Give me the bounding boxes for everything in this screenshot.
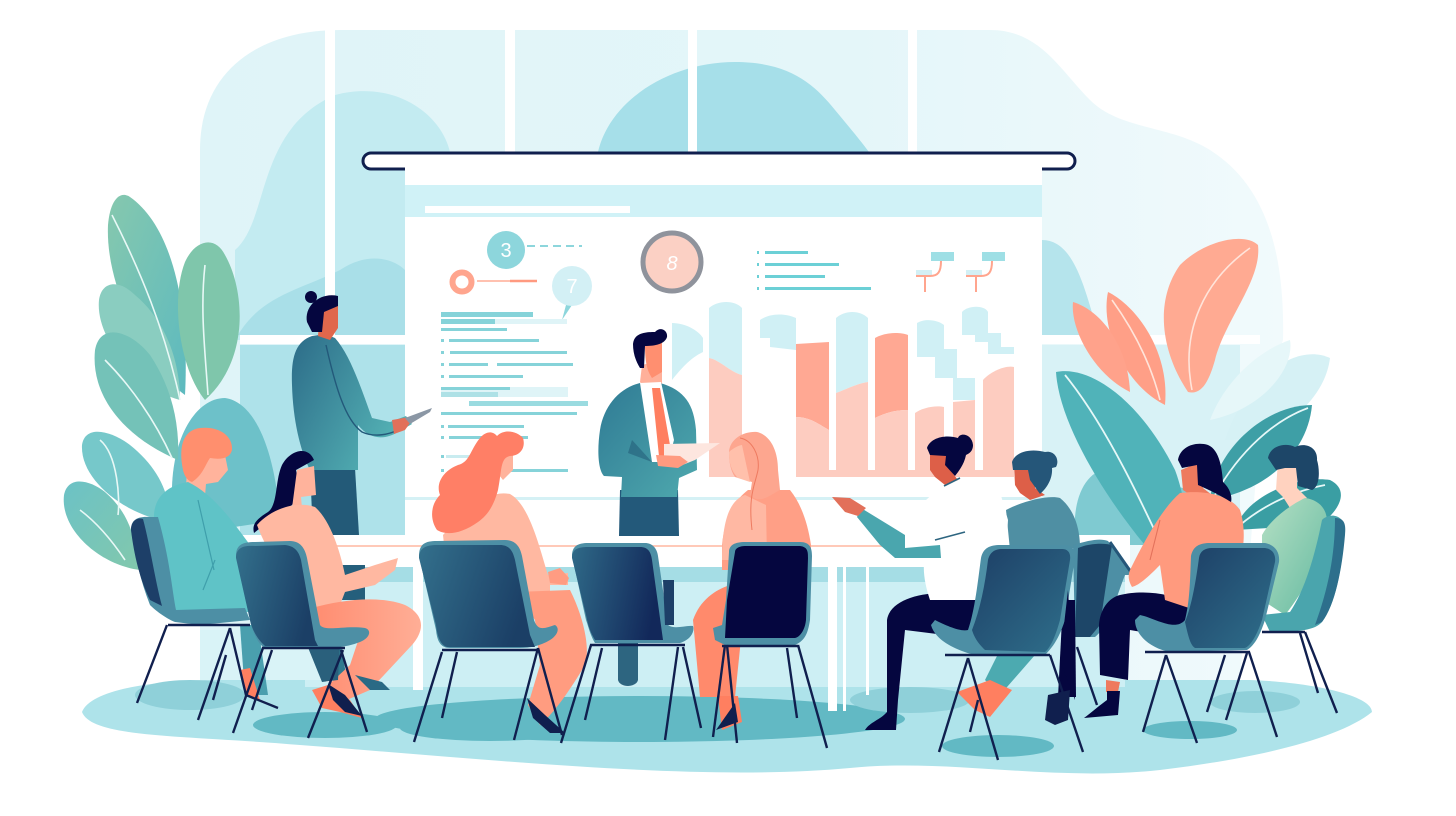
standing colleague [292,291,432,680]
background wall blob [200,30,1283,680]
text lines left [441,312,588,472]
floor shadows [135,680,1300,757]
presenter hair [633,329,667,368]
shoe [312,685,362,718]
leaf: salmon left [1073,302,1130,392]
head and hair [729,432,780,499]
hair [432,432,524,533]
laptop edge [338,565,365,600]
small connectors [916,252,1005,292]
torso and arm [1129,492,1244,610]
presenter neck [640,360,662,395]
leaf: teal right top [1210,405,1312,500]
presenter lower leg [618,640,638,686]
screen surface [405,155,1042,540]
face [495,445,513,480]
number badge 7 [552,266,592,320]
face [930,452,958,485]
attendee 1: teal shirt [154,428,268,700]
chair 8 [1135,543,1279,743]
lower body [693,585,745,697]
leaf: salmon big [1164,239,1258,393]
lower leg [240,625,268,695]
leaf: pale right [1225,354,1330,440]
attendee 2: dark hair [253,451,421,718]
chair 6 [931,545,1083,760]
torso [292,334,412,470]
shirt [1262,498,1327,615]
presenter jacket [598,383,697,497]
sleeve and hand [832,497,941,558]
shoe [718,696,742,730]
attendee 8: coral top [1084,444,1244,718]
chair 2 [233,541,369,738]
hand and tablet [392,408,432,434]
window hill left [235,91,450,340]
window lower left pane [240,345,405,535]
floor [82,680,1372,773]
attendee 9: green shirt [1262,445,1327,615]
chair 5 [713,542,827,748]
hair [253,451,314,533]
leaf: lower mid [95,332,178,460]
window mullions [240,30,1260,344]
leaf: mid [99,284,180,400]
chair 7 [1073,540,1133,705]
attendee 5: pink long hair [693,432,811,730]
hair [181,428,232,482]
leaf: right oval [178,242,240,400]
hair [1012,450,1057,494]
gauge [643,233,701,291]
presenter shirt and tie [640,382,674,466]
gauge: 8 [666,253,678,275]
number badge 3: 3 [500,240,512,262]
plant: left [64,195,280,570]
presenter face [645,340,662,378]
hair [1268,445,1319,490]
face [1014,465,1045,500]
bar chart [672,302,1014,477]
legs [310,468,359,535]
head [305,291,338,340]
face [1276,455,1307,508]
leaf: top [108,195,186,395]
attendee 6: white shirt [832,435,1076,730]
presenter [598,329,720,686]
table [200,535,1130,711]
presenter legs [619,490,679,536]
face [292,466,316,508]
chair 4 [561,543,701,743]
attendee 7: teal shirt behind [957,450,1080,717]
chair 1 [131,517,278,720]
plant: right [1056,239,1341,592]
torso and arm [443,493,568,610]
chair 9 [1262,516,1345,713]
number badge 7: 7 [566,276,578,298]
leaf: salmon mid [1107,292,1165,405]
leaf: teal large [1056,371,1190,592]
leaf: teal right low [1235,479,1341,530]
neck and face [186,455,228,496]
pants [1099,592,1195,680]
projector screen [405,155,1042,540]
leg and shoe [985,650,1035,695]
torso [722,490,811,570]
text lines right [757,251,871,290]
number badge 3 [487,231,582,269]
leaf: blob behind person [172,398,280,530]
legs [312,599,421,705]
ring marker [452,272,537,292]
leaf: bottom [64,481,140,570]
leaf: lower [82,432,170,522]
pants [865,593,990,730]
hair [927,435,973,476]
chair 3 [414,540,562,742]
torso [1006,497,1080,550]
face [1181,462,1212,498]
shirt [154,482,250,612]
torso and arm [257,505,398,608]
roller bar [363,153,1075,169]
hair [1178,444,1231,502]
blob leaf [1075,468,1195,545]
legs [515,590,587,725]
shirt [902,481,1008,600]
window hill centre [598,62,869,152]
attendee 3: red wavy hair [432,432,587,733]
document and hand [656,443,720,468]
